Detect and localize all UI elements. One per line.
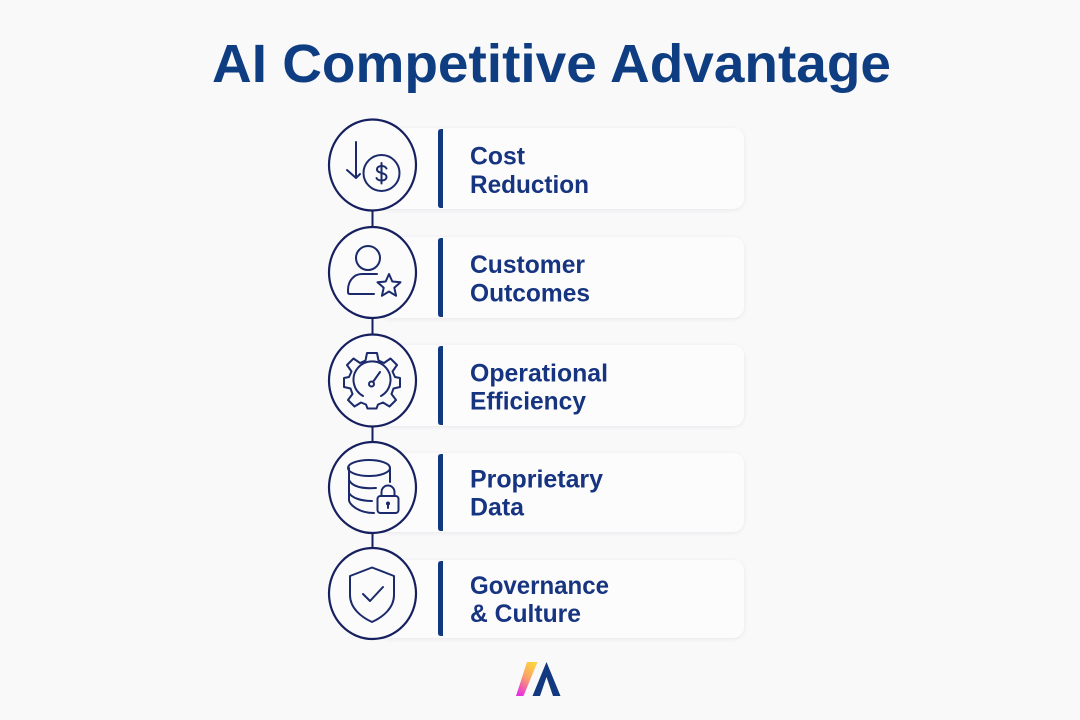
panel: customer outcomes xyxy=(378,237,744,318)
icon: cost down xyxy=(329,120,416,210)
label: cost reduction: Reduction xyxy=(470,171,589,199)
icon: shield check xyxy=(329,548,416,639)
label: operational efficiency: Efficiency xyxy=(470,387,586,415)
panel: cost reduction xyxy=(378,128,744,209)
label: proprietary data: Proprietary xyxy=(470,466,603,494)
label: cost reduction: Cost xyxy=(470,142,526,170)
label: governance and culture: & Culture xyxy=(470,600,581,628)
panel: operational efficiency xyxy=(378,345,744,426)
connector line xyxy=(372,208,374,550)
panel: governance and culture xyxy=(378,560,744,638)
label: proprietary data: Data xyxy=(470,494,525,522)
icon: gear gauge xyxy=(329,334,416,426)
panel: proprietary data xyxy=(378,453,744,532)
icon: database lock xyxy=(329,442,416,533)
label: customer outcomes: Customer xyxy=(470,251,585,279)
label: operational efficiency: Operational xyxy=(470,359,608,387)
label: governance and culture: Governance xyxy=(470,572,609,600)
label: customer outcomes: Outcomes xyxy=(470,280,590,308)
logo xyxy=(516,662,560,696)
icon: customer star xyxy=(329,227,416,318)
title: AI Competitive Advantage xyxy=(212,34,891,94)
